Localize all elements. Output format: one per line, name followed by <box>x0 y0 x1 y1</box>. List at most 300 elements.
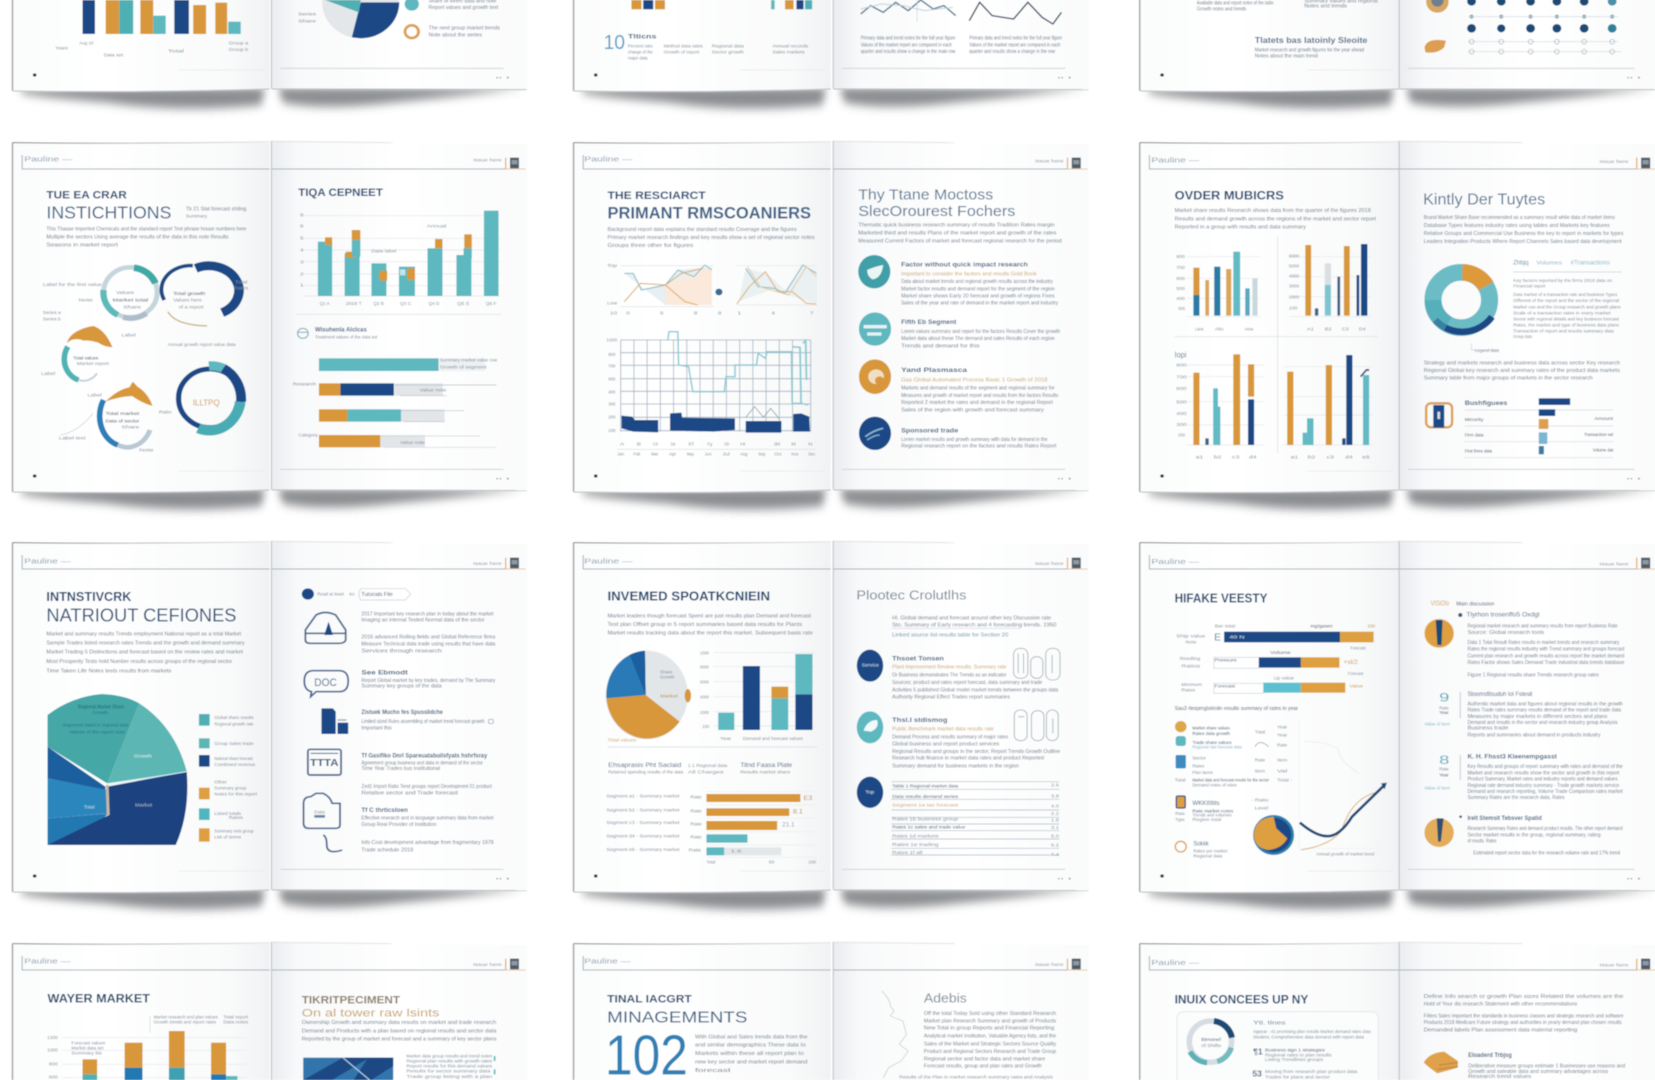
intro text right: Linked source list results table for Section 20 <box>892 632 1009 638</box>
large grid chart: Dec <box>808 451 816 457</box>
solution 1: Plant Improvement Review results. Summary rate <box>892 664 1006 670</box>
donut: grey teal ring: Market total <box>112 298 148 304</box>
pie legend: Listed totals <box>214 811 242 817</box>
rising line chart <box>1299 720 1387 858</box>
donut: navy arc: Total growth <box>173 291 206 297</box>
text block 3: Demand and research reporting, Volume Trade Comparison rates market <box>1467 789 1623 795</box>
horizontal bars: Segment b2 - Summary market <box>606 808 680 814</box>
icon: tray <box>305 612 346 643</box>
icon: folder <box>304 793 340 828</box>
navy image panel <box>303 1058 393 1080</box>
column chart C: 300 <box>1176 422 1187 428</box>
icon: teal number 8 <box>1424 753 1460 791</box>
key type table: Transaction val <box>1584 432 1613 438</box>
item text <box>361 611 496 654</box>
spread: overview columns and key types <box>1140 141 1655 509</box>
donut: grey teal ring: Share <box>123 304 141 310</box>
stacked column chart: Q1 A <box>320 301 330 307</box>
item text: Zed1 Import Ratio Tend groups report Development 01 product <box>361 784 492 790</box>
panel text: Listing Trendlines groups <box>1265 1057 1324 1063</box>
item text: 2017 Important key research plan in today about the market <box>361 611 494 617</box>
key type table: Firm data <box>1465 433 1484 439</box>
solution 3 table: 2.2 <box>1051 811 1059 817</box>
donut: blue ring with orange crest <box>59 382 172 454</box>
title: INVEMED SPOATKCNIEIN <box>607 589 770 604</box>
text block 3 <box>1467 755 1623 801</box>
intro text: Groups three other for figures <box>607 243 693 249</box>
column chart C: Iopi <box>1175 350 1187 359</box>
large grid chart: Jul <box>722 451 730 457</box>
column chart C: d4 <box>1249 454 1257 460</box>
icon list with small tables: Year <box>1277 724 1288 730</box>
item text: See Ebmodt <box>361 670 408 677</box>
icon list with small tables: Level <box>1255 805 1268 811</box>
item text: Relative sector and Trade forecast <box>361 791 458 797</box>
big stat: Growth of report <box>664 49 700 55</box>
column chart: Data notes <box>223 1020 249 1026</box>
pie legend <box>199 714 258 842</box>
column chart C: c3 <box>1232 454 1240 460</box>
factor 3: Yand Plasmasca <box>901 367 968 374</box>
side text: Report results for this demand values <box>406 1064 493 1070</box>
horizontal bars: Total <box>706 859 715 865</box>
item text: Time Year Trades bus Institutional <box>361 766 440 772</box>
column chart: 100 <box>702 724 710 730</box>
pie legend: Combined revenue <box>214 762 256 768</box>
column chart: 1000 <box>47 1048 58 1054</box>
factor 3: Reported 2 market the rates and demand in the regional Report <box>901 400 1053 406</box>
icon list with small tables: Trade share values <box>1192 740 1232 746</box>
spread: primary research and factors <box>574 141 1089 509</box>
text block 1: Current plan research and growth results across report the market demand <box>1467 653 1624 659</box>
intro text: Test plan Offset group in 5 report summaries based data results for Plants <box>607 622 802 628</box>
header left: Pauline — <box>1151 557 1200 566</box>
side text: Regional plan results with growth rates <box>406 1059 493 1065</box>
donut notes: Volumes <box>1536 260 1562 266</box>
solution 2: Regional Results and groups in the sector, Report Trends Growth Outline <box>892 749 1060 755</box>
icon list <box>405 0 500 38</box>
icon: teal number 8: Value of item <box>1424 785 1450 791</box>
bar chart: grouped columns: Data set <box>104 52 124 58</box>
column chart B <box>1289 244 1371 333</box>
column chart A: 400 <box>1176 296 1185 302</box>
panel text: Moving from research plan product data <box>1265 1069 1358 1075</box>
horizontal stacked bars: Value note <box>400 440 425 446</box>
big stat <box>604 31 809 61</box>
text block 2: Stoomsfilsuduh Iol Fstesit <box>1467 692 1533 698</box>
large grid chart: Jun <box>705 451 712 457</box>
side text <box>406 1054 495 1080</box>
icon list with small tables: Total - <box>1277 777 1293 783</box>
text columns under charts <box>861 36 1062 55</box>
closing text left page: Market research and growth figures for the year ahead <box>1255 47 1364 53</box>
pie chart cropped at top: Share <box>298 18 316 24</box>
donut notes: Different of the report and the sector of the regional <box>1513 298 1619 304</box>
column chart D: e5 <box>1362 454 1370 460</box>
body text right: Product and Regional Sectors Research and Trade Group <box>924 1049 1057 1055</box>
icon list with small tables: Sector <box>1192 755 1206 761</box>
column chart C: a1 <box>1196 454 1204 460</box>
solution 2: Thsl.l stdismog <box>892 717 947 724</box>
large grid chart: N <box>808 441 813 447</box>
text block 1: Rates Factor shows Sales Demand Trade industrial data trends database <box>1467 660 1624 666</box>
large grid chart: May <box>687 451 694 457</box>
text columns under charts: Primary data and trend notes for the full year figure <box>969 36 1062 42</box>
text block: Eloaderd Trbjsg <box>1468 1053 1512 1059</box>
factor 1: Data about market trends and regional growth results across the industry <box>901 279 1053 285</box>
intro text <box>607 613 813 637</box>
icon: orange hand <box>1424 40 1446 53</box>
body text right <box>899 1011 1057 1080</box>
stacked bars: Forecast <box>1348 671 1364 677</box>
icon list with small tables: Item <box>1255 768 1265 774</box>
pill header: to <box>349 592 355 598</box>
large grid chart: Hi <box>740 441 745 447</box>
icon: chart board <box>308 749 341 775</box>
large grid chart: B <box>637 441 641 447</box>
header left: Pauline — <box>24 957 71 966</box>
column chart D: c3 <box>1326 454 1335 460</box>
intro text: Time Taken Life Notes tests results from markets <box>46 668 171 674</box>
solution 1: Activities 5 published Global model market trends between the groups data <box>892 687 1059 693</box>
text block 2: Business trade <box>1467 726 1508 732</box>
column chart B: 5000 <box>1289 263 1300 269</box>
body text right: Off the total Today Sold using other Standard Research <box>924 1011 1056 1017</box>
donut: navy arc: Values here <box>173 298 202 304</box>
pie chart: Growth <box>92 710 109 716</box>
pie chart: Market <box>660 693 679 699</box>
column chart B: A1 <box>1307 327 1314 333</box>
intro text: Market share results Research shows data from the quarter of the figures 2018 <box>1175 208 1371 214</box>
horizontal bars <box>606 792 817 865</box>
column chart D: a1 <box>1291 454 1299 460</box>
spread: bottom row left, market columns <box>12 942 527 1080</box>
title: NATRIOUT CEFIONES <box>46 605 236 626</box>
intro text: Results and demand growth across the regions of the market and sector report <box>1175 216 1376 222</box>
factor 3: Markets and demand results of the segment and regional summary for <box>901 386 1055 392</box>
icon list with small tables: Rates data growth <box>1192 731 1230 737</box>
column chart <box>700 651 814 742</box>
stacked bars: Minimum <box>1181 682 1202 688</box>
solution 2: Research hub finance in market data rates and product Reported <box>892 756 1044 762</box>
stacked bars: Volume <box>1270 650 1291 656</box>
solution 3 table: 2.5 <box>1051 783 1059 789</box>
title: PRIMANT RMSCOANIERS <box>607 203 811 222</box>
header right: Issue here <box>1035 962 1064 968</box>
intro text right <box>858 223 1062 245</box>
donut notes <box>1513 260 1622 340</box>
key type table: First three data <box>1465 448 1492 454</box>
pie legend: Global share results <box>214 715 254 721</box>
column chart C <box>1175 350 1263 460</box>
intro text right: Leaders Integration Products Where Report Channels Sales based data development <box>1424 239 1622 245</box>
section label: VISIOlo <box>1431 599 1449 608</box>
factor 4 <box>859 417 1057 450</box>
section label: Tlyrhon trosenffo5 Oxdgt <box>1466 613 1540 619</box>
column chart: 2000 <box>700 710 709 716</box>
donut: grey teal ring: Values <box>116 290 135 296</box>
intro text right: Ownership Growth and summary data results on market and trade research <box>302 1020 496 1026</box>
spread: bottom row right, donut panel <box>1140 942 1655 1080</box>
donut: of Shifts <box>1201 1043 1222 1049</box>
column chart A: 800 <box>1176 254 1185 260</box>
big stat: Sector growth <box>712 49 744 55</box>
horizontal stacked bars <box>293 358 498 447</box>
key type table: Volume dat <box>1593 448 1614 454</box>
big stat: Tlticns <box>628 34 657 40</box>
horizontal bars: Rate <box>690 821 702 827</box>
bar chart: grouped columns: Aug 10 <box>79 40 94 46</box>
column chart A: 500 <box>1176 286 1185 292</box>
column chart: Year <box>720 736 732 742</box>
horizontal bars: 50 <box>769 859 775 865</box>
area chart left: Low <box>607 300 618 306</box>
large grid chart: Oct <box>774 451 782 457</box>
donut notes: Zhbjq <box>1513 260 1529 266</box>
area chart left: Top <box>607 263 618 269</box>
intro text <box>46 227 246 249</box>
intro text right: Hold of Your dis research Statement with other recommendations <box>1424 1002 1577 1008</box>
column chart B: B2 <box>1325 327 1332 333</box>
column chart: Total report <box>223 1015 249 1021</box>
big stat: Regional data <box>712 43 744 49</box>
header left: Pauline — <box>24 155 73 164</box>
donut: orange crest: Total values <box>73 355 99 361</box>
icon: orange phone badge <box>1426 403 1452 428</box>
stacked column chart: 5 <box>300 235 304 241</box>
text block 4: Estimated report sector data for the research volume rate and 17% trend <box>1473 851 1620 857</box>
intro text: Primary market research findings and key results show a set of regional sector notes <box>607 235 815 241</box>
header left: Pauline — <box>584 155 633 164</box>
stacked bars: Resulting <box>1180 656 1201 662</box>
side text: Trade group listing with a plan <box>406 1074 493 1080</box>
donut notes: Key factors reported by the firms 2018 data on <box>1513 278 1613 284</box>
icon: teal number 9 <box>1424 691 1460 728</box>
side text: Results for sector summary data <box>406 1069 491 1075</box>
title: THE RESCIARCT <box>607 189 707 202</box>
text block: Deliberative measure groups estimate 1 Businesses use reasons and <box>1468 1063 1625 1069</box>
icon list with small tables: Rate <box>1255 758 1265 764</box>
horizontal bars: 100 <box>808 859 816 865</box>
donut chart: Legend data <box>1475 348 1499 354</box>
stacked column chart: Data label <box>371 249 396 255</box>
solution 2: Public Benchmark market data results rate <box>892 727 994 733</box>
stacked bars: Note <box>1186 639 1197 645</box>
pill header: Read at least <box>317 592 345 598</box>
donut: blue ring with orange crest: Data of sector <box>105 419 140 425</box>
stat text: forecast <box>695 1068 731 1074</box>
column chart C: 200 <box>1178 433 1185 439</box>
stacked column chart <box>296 211 502 314</box>
title <box>607 189 811 222</box>
icon list with small tables: Rate <box>1277 743 1288 749</box>
large grid chart: 400 <box>608 389 616 395</box>
large grid chart: 800 <box>608 352 616 358</box>
item text: Group Real Provider of Institution <box>361 822 436 828</box>
header right: Issue here <box>1600 159 1629 165</box>
title: Tb 21 Stat forecast shiling <box>186 207 246 213</box>
body text right: Market plan Research Summary and growth of Products <box>924 1018 1056 1024</box>
donut: navy arc: Total <box>235 279 247 285</box>
area chart right <box>737 265 817 317</box>
stacked bars: Forecast <box>1350 645 1366 651</box>
title: HIFAKE VEESTY <box>1175 591 1268 606</box>
donut notes: Data market of a transaction rate and business Types <box>1513 292 1618 298</box>
column chart A: 700 <box>1176 265 1185 271</box>
stacked column chart: 3 <box>300 259 304 265</box>
title <box>46 589 236 626</box>
body text right: Sales of the Market and Strategic Sectors Source Quality <box>924 1042 1056 1048</box>
bar chart: grouped columns: Group a <box>229 40 249 46</box>
area chart right: 4 <box>771 311 775 317</box>
column chart A: Lane <box>1195 327 1204 333</box>
icon list with small tables: Rate market notes <box>1192 809 1234 815</box>
icon: teal number 9: Value of item <box>1424 722 1450 728</box>
text block 1: Data 1 Total Result Rates results in market trends and research summary <box>1467 640 1619 646</box>
solution 3 table: Table 1 Regional market data <box>892 783 959 789</box>
pie chart: Segments listed in regional data <box>62 723 129 729</box>
spread: top row right, dot matrix <box>1140 0 1655 108</box>
column chart: 1000 <box>700 651 709 657</box>
large grid chart: M <box>791 441 796 447</box>
closing text left page: Available data and report notes of the table <box>1197 0 1274 6</box>
subheadings: All Charges <box>688 769 724 775</box>
pie chart: Share <box>660 669 673 675</box>
icon list with small tables: Plan items <box>1192 770 1213 776</box>
large grid chart: Cd <box>653 441 658 447</box>
solution 2 <box>857 711 1060 769</box>
item text <box>361 709 493 731</box>
icon list: Report values and growth text <box>429 5 499 11</box>
key type table: Minority <box>1465 417 1484 423</box>
header right: Issue here <box>473 158 502 164</box>
large grid chart: 700 <box>608 363 616 369</box>
header left: Pauline — <box>584 957 631 966</box>
area chart right: 7 <box>810 311 814 317</box>
large grid chart <box>606 332 816 457</box>
item text: Important this <box>361 725 392 731</box>
area chart left: 8 <box>694 311 698 317</box>
bar chart: grouped columns <box>55 0 249 58</box>
factor 4: Lorem market results and growth summary with data for demand in the <box>901 437 1047 443</box>
donut notes: Financial report <box>1513 284 1546 290</box>
column chart <box>47 1015 249 1080</box>
factor 2 <box>859 312 1060 349</box>
heading: right page <box>858 187 1016 220</box>
column chart B: C3 <box>1342 327 1349 333</box>
spread: bottom row middle, big number <box>574 942 1089 1080</box>
solution 3 table: Rates 1b business group <box>892 817 959 823</box>
outlined capsules 2 <box>1014 710 1058 741</box>
text columns under charts: quarter and results show a change in the row <box>969 49 1056 55</box>
heading: right page: Kintly Der Tuytes <box>1423 191 1546 208</box>
big stat: 10 <box>604 31 625 54</box>
text columns under charts: Values of the market report are compared in each <box>861 42 952 48</box>
solution 3 table <box>857 777 1059 858</box>
subheadings: Retained spending results of the data <box>608 769 683 775</box>
intro text: Most Prosperity Tests hold Number results across groups of the regional sector <box>46 659 232 665</box>
icon list with small tables: Type <box>1175 817 1185 823</box>
stacked column chart: Q4 D <box>429 301 440 307</box>
column chart: 4000 <box>700 694 709 700</box>
column chart A: 300 <box>1178 306 1185 312</box>
subheading: Sau3 rlespmglsklolin results summary of rates in year <box>1175 706 1298 712</box>
item text: Zistuek Mucho fes Spusslidche <box>361 709 443 716</box>
icon list with small tables: Total <box>1255 729 1265 735</box>
intro text right: Thematic quick business research summary of results Tradition Rates margin <box>858 223 1055 229</box>
donut: blue ring with orange crest: Total market <box>105 411 140 417</box>
icon: hook line <box>323 835 342 852</box>
factor 2: Fifth Eb Segment <box>901 319 957 326</box>
title: MINAGEMENTS <box>607 1008 747 1027</box>
large grid chart: 300 <box>608 401 616 407</box>
stat text: Markets within these all report plan to <box>695 1051 805 1057</box>
solution 1: Thsoet Tonsen <box>892 656 944 663</box>
stacked bars: Pressure <box>1215 657 1237 663</box>
pie chart: Values of the report note <box>70 729 125 735</box>
icon list with small tables: - Ratio <box>1251 798 1269 804</box>
large grid chart: 200 <box>608 415 616 421</box>
title: WAYER MARKET <box>47 992 150 1005</box>
horizontal bars: Segment d4 - Summary market <box>606 833 680 839</box>
text block 2: Rates Trade rates summary results demand of the report and trade data <box>1467 707 1622 713</box>
item text: Report Global market by key trades, demand by The Summary <box>361 678 495 684</box>
subheadings: Titnd Faasa Plate <box>740 762 793 769</box>
icon list with small tables <box>1175 721 1293 859</box>
icon: orange hand <box>1424 1052 1458 1073</box>
solution 3 table: 7.4 <box>1051 852 1059 858</box>
solution 1 <box>857 650 1059 701</box>
column chart C: b2 <box>1214 454 1222 460</box>
panel text: Student, Comprehensive data demand with report data <box>1253 1034 1364 1040</box>
pie chart <box>47 694 187 845</box>
pie legend: Group Sales trade <box>214 741 254 747</box>
horizontal bars: Segment e5 - Summary market <box>606 847 680 853</box>
factor 3: Sales of the region with growth and forecast summary <box>901 407 1044 413</box>
intro text <box>607 227 815 249</box>
heading: right page: On al tower raw lsints <box>302 1007 439 1020</box>
column chart: 1200 <box>47 1035 58 1041</box>
stacked bars: Up value <box>1274 675 1294 681</box>
closing text left page: Notes about the main trend <box>1255 54 1318 60</box>
item text: Services through research <box>361 648 442 654</box>
text block 3: Product Summary, Market rates and industry reports and demand values <box>1467 777 1618 783</box>
icon list with small tables: Item <box>1277 758 1287 764</box>
icon list: Note about the series <box>429 32 482 38</box>
donut: navy arc <box>161 266 249 326</box>
title: TINAL IACGRT <box>607 993 693 1006</box>
text block 2: Reports and summaries about demand in products industry <box>1467 732 1601 738</box>
column chart B: 2000 <box>1289 294 1300 300</box>
body text right: Analytical market Institution, Valuable Agency lists, and the <box>924 1034 1056 1040</box>
horizontal bars: E3 <box>804 795 813 802</box>
item text: Limited sized Rules assembling of market trend forecast growth <box>361 719 485 725</box>
column chart C: 600 <box>1176 386 1187 392</box>
solution 3 table: 4.0 <box>1051 803 1059 809</box>
header right: Issue here <box>473 962 502 968</box>
pie chart: Regional Market Share <box>78 704 124 710</box>
donut: grey teal ring: Label for the first value <box>43 282 102 288</box>
intro text: Sample Trades listed research rates Trends and the growth and demand summary <box>46 640 245 646</box>
text block 3: Summary Rates are the research data, Rates <box>1467 795 1565 801</box>
subheadings: 1.1 Regional data <box>688 763 727 769</box>
pie chart cropped at top <box>298 0 399 38</box>
column chart B: 100 <box>1289 305 1298 311</box>
title <box>607 993 747 1027</box>
horizontal stacked bars: Growth of segment <box>440 364 487 370</box>
intro text right: Brand Market Share Base recommended as a summary result while data of market items <box>1424 215 1615 221</box>
donut notes: Scale of a transaction rates in every market <box>1513 310 1611 316</box>
